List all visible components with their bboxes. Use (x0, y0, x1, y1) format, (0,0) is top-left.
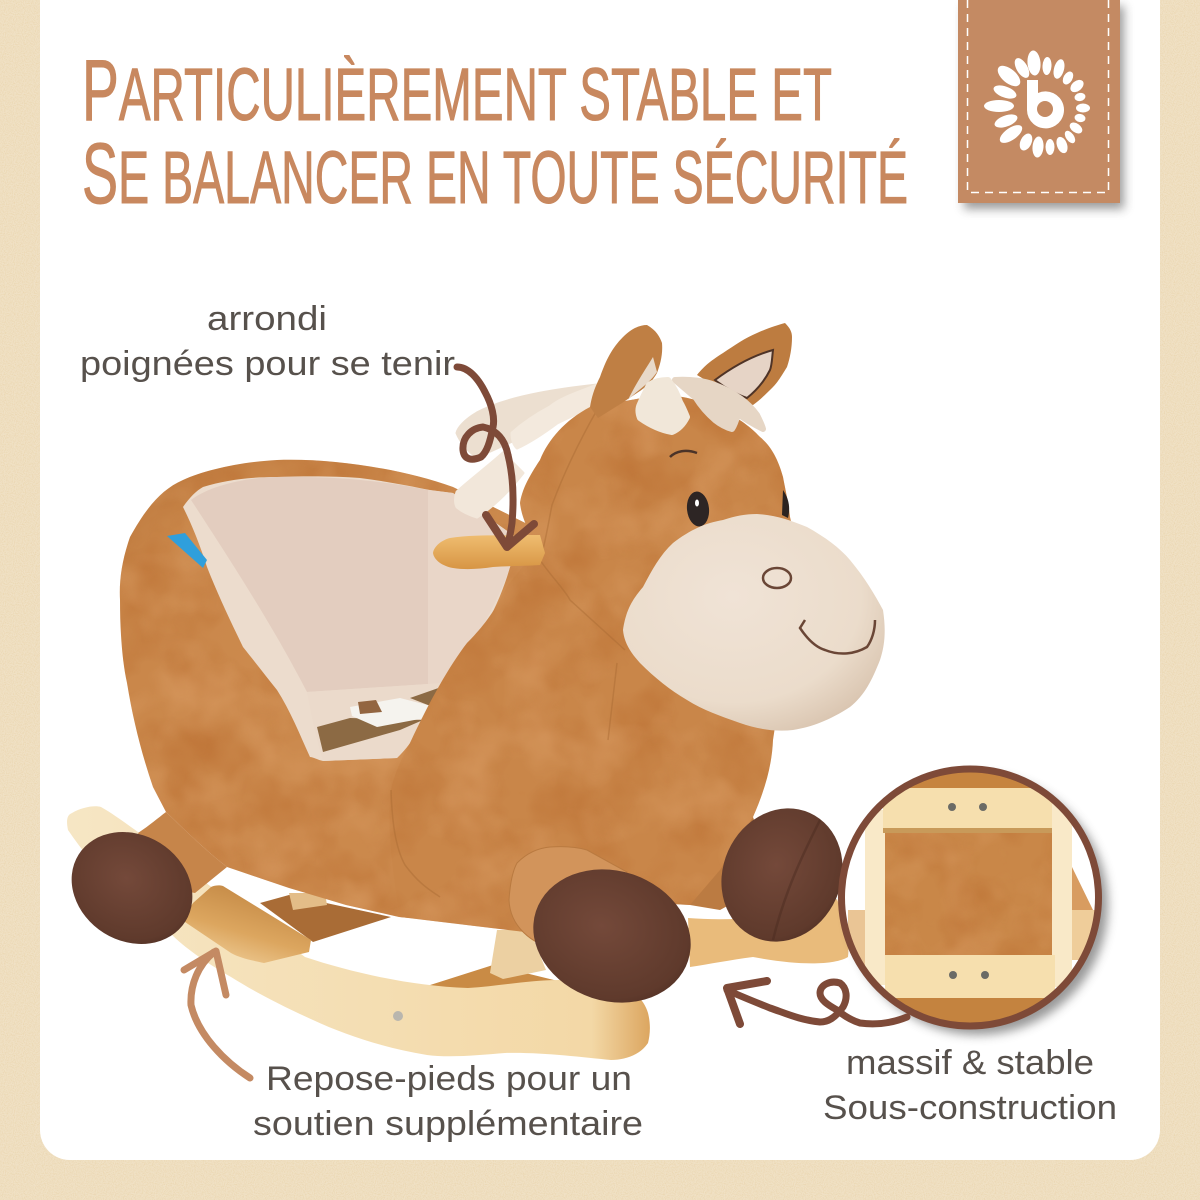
label: underside: massif & stable (846, 1044, 1094, 1082)
rocker screw (393, 1011, 403, 1021)
title: PARTICULIÈREMENT STABLE ET (82, 43, 832, 139)
front hoof (516, 849, 708, 1023)
seat lining (183, 476, 520, 761)
smile (800, 620, 875, 654)
wooden handle (433, 535, 545, 569)
right leg (690, 817, 775, 910)
forelock (638, 380, 763, 432)
label: underside: Sous-construction (823, 1089, 1117, 1127)
neck and head (389, 395, 800, 932)
arrow: footrest (184, 951, 250, 1078)
nostril (763, 568, 791, 588)
seat strap and buckle (317, 685, 447, 752)
blue tag (167, 533, 207, 568)
label: handles: arrondi (207, 300, 327, 338)
eyebrow (670, 451, 697, 457)
seams (391, 410, 625, 897)
second eye (782, 490, 789, 518)
label: handles (80, 300, 455, 383)
rear mane (456, 385, 597, 517)
toy horse (50, 323, 885, 1023)
icon: brand logo (984, 50, 1090, 158)
rocker base (67, 806, 848, 1060)
horse body (120, 460, 753, 932)
right ear (697, 323, 792, 405)
inset: underside detail (842, 769, 1108, 1035)
muzzle (623, 514, 885, 731)
rear rocker (688, 899, 848, 967)
footrest (182, 885, 311, 963)
arrow: underside (727, 981, 907, 1024)
left leg (138, 812, 227, 893)
label: footrest: soutien supplémentaire (253, 1105, 643, 1143)
eye (685, 490, 711, 528)
label: underside (823, 1044, 1117, 1127)
label: footrest: Repose-pieds pour un (266, 1060, 632, 1098)
underside photo (848, 770, 1097, 1030)
left ear (590, 325, 662, 418)
label: handles: poignées pour se tenir (80, 345, 455, 383)
centre block (490, 930, 546, 979)
brand tag (958, 0, 1124, 209)
title (82, 43, 908, 222)
left hoof (50, 810, 214, 966)
cross bar (260, 895, 391, 942)
front leg (509, 847, 627, 950)
right hoof (700, 789, 864, 961)
label: footrest (253, 1060, 643, 1143)
main rocker (67, 806, 650, 1060)
arrow: handle (457, 367, 534, 547)
